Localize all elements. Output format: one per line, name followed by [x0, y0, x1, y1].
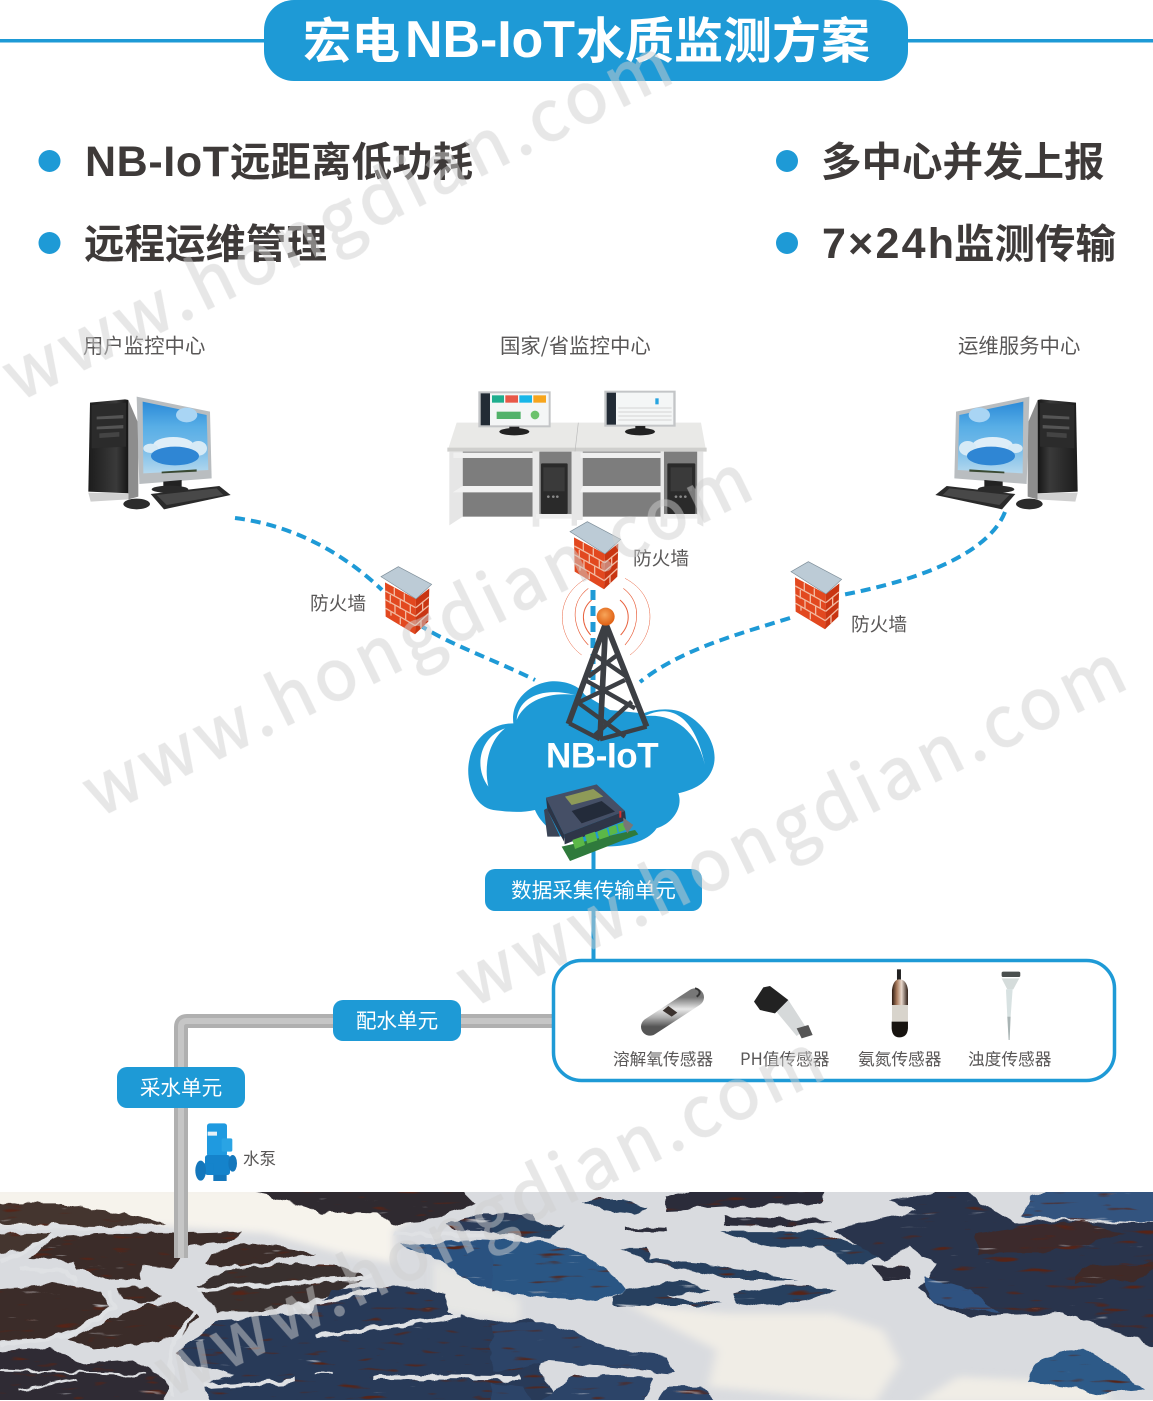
cloud label: NB-IoT — [546, 737, 659, 776]
feature: long range low power — [38, 129, 473, 188]
feature: round-the-clock monitoring: 监测传输 — [954, 211, 1116, 270]
label: turbidity sensor: 浊度传感器 — [968, 1046, 1052, 1070]
icon: monitoring desks — [447, 391, 707, 527]
icon: turbidity sensor — [1002, 972, 1020, 1040]
label: dissolved oxygen sensor: 溶解氧传感器 — [613, 1046, 713, 1070]
label: operations service centre: 运维服务中心 — [958, 329, 1080, 359]
icon: operations computer — [935, 397, 1078, 509]
right water — [492, 1187, 1153, 1401]
feature: long range low power: 远距离低功耗 — [230, 129, 473, 188]
feature list — [38, 129, 1116, 270]
water photo — [0, 1187, 1153, 1401]
feature: long range low power: NB-IoT — [85, 138, 229, 186]
feature: round-the-clock monitoring — [776, 211, 1116, 270]
label: user monitoring centre: 用户监控中心 — [83, 329, 205, 359]
panel: sensors — [554, 960, 1114, 1080]
dashed link: firewall to cloud — [418, 624, 535, 680]
title banner: 水质监测方案 — [576, 2, 870, 73]
title banner: NB-IoT — [405, 11, 575, 69]
bright foam right — [625, 1303, 1108, 1401]
foam veins — [0, 1227, 520, 1397]
dashed link: national centre to tower — [590, 590, 596, 720]
label: ammonia sensor: 氨氮传感器 — [858, 1046, 942, 1070]
water sampling pill: 采水单元 — [140, 1071, 222, 1101]
cloud and tower — [468, 578, 715, 847]
label: pump: 水泵 — [243, 1146, 276, 1170]
icon: firewall right — [791, 562, 842, 629]
icon: ammonia sensor — [892, 969, 908, 1037]
dashed link: user centre to firewall — [235, 518, 382, 590]
icon: firewall left — [381, 567, 432, 634]
label: firewall left: 防火墙 — [310, 589, 366, 616]
water distribution pill — [333, 1000, 461, 1041]
data acquisition pill — [485, 869, 702, 911]
icon: firewall centre — [570, 522, 621, 589]
tower — [568, 623, 647, 739]
label: national monitoring centre: 国家/省监控中心 — [500, 329, 651, 359]
header rule — [0, 39, 1153, 42]
icon: dissolved oxygen sensor — [650, 988, 700, 1027]
pipe — [181, 1021, 552, 1258]
bright foam — [0, 1187, 520, 1323]
cloud highlights — [480, 692, 705, 787]
icon: user computer — [88, 397, 231, 509]
feature: round-the-clock monitoring: 7×24h — [822, 220, 954, 268]
dashed link: firewall to tower — [640, 618, 790, 682]
connector: cloud to sensor box — [592, 835, 596, 962]
feature: multi-centre reporting: 多中心并发上报 — [821, 129, 1104, 188]
label: firewall centre: 防火墙 — [633, 544, 689, 571]
dashed link: operations centre to firewall — [842, 512, 1005, 595]
label: firewall right: 防火墙 — [851, 610, 907, 637]
title banner: 宏电 — [303, 2, 400, 72]
left rocks — [0, 1187, 560, 1401]
water sampling pill — [117, 1067, 245, 1108]
watermark: www.hongdian.com — [63, 425, 766, 837]
watermark: www.hongdian.com — [0, 9, 686, 421]
label: pH sensor: PH值传感器 — [740, 1046, 830, 1070]
feature: remote operations: 远程运维管理 — [84, 211, 327, 270]
data acquisition pill: 数据采集传输单元 — [511, 874, 676, 904]
icon: data acquisition device — [544, 784, 638, 861]
cloud — [468, 681, 715, 847]
tower beacon — [597, 608, 615, 626]
icon: pump — [195, 1123, 237, 1181]
signal waves — [562, 578, 650, 655]
icon: pH sensor — [754, 986, 813, 1038]
title banner — [264, 0, 908, 81]
watermark: www.hongdian.com — [437, 615, 1140, 1027]
water distribution pill: 配水单元 — [356, 1004, 438, 1034]
